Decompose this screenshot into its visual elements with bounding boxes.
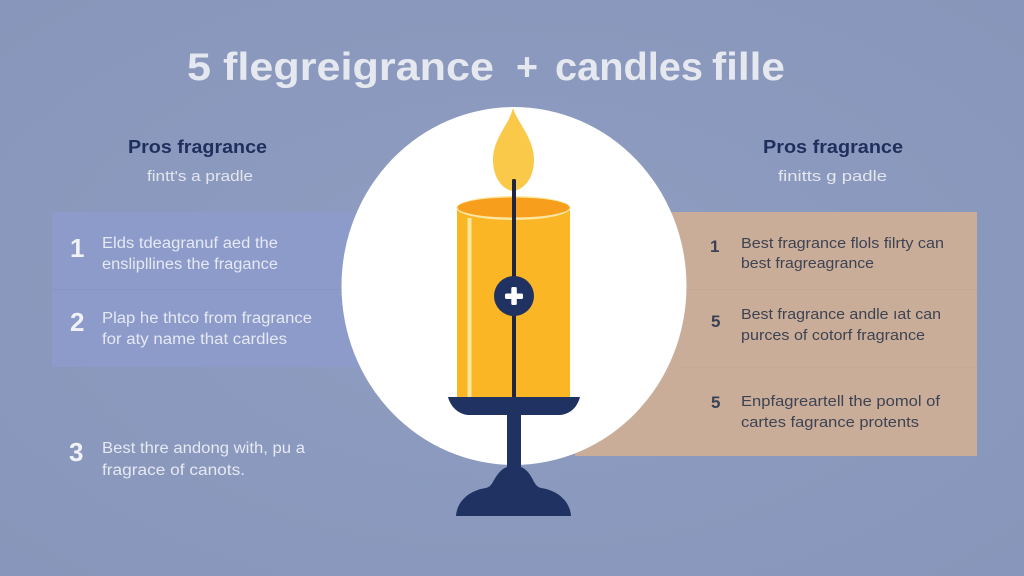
left item 2: Plap he thtco from fragrance <box>102 310 312 327</box>
title <box>187 46 785 89</box>
right item 1: best fragreagrance <box>741 255 874 272</box>
right item 2: purces of cotorf fragrance <box>741 327 925 344</box>
title: 5 flegreigrance <box>187 46 494 89</box>
heading: right column <box>763 137 903 185</box>
left item 1: enslipllines the fragance <box>102 256 278 273</box>
panel: right pros list background <box>575 212 977 456</box>
heading: right column: Pros fragrance <box>763 137 903 157</box>
left item 3: 3 <box>69 437 83 467</box>
icon: candle <box>448 108 580 516</box>
right item 3: 5 <box>711 393 720 412</box>
right item 1: Best fragrance flols filrty can <box>741 235 944 252</box>
left item 1: Elds tdeagranuf aed the <box>102 235 278 252</box>
left item 2: 2 <box>70 307 84 337</box>
candle holder <box>448 397 580 516</box>
left item 2: for aty name that cardles <box>102 331 287 348</box>
plus badge <box>494 276 534 316</box>
panel: left pros list background <box>52 212 362 367</box>
title: + <box>516 46 538 89</box>
heading: left column: Pros fragrance <box>128 137 267 157</box>
right column subheading: finitts g padle <box>778 169 887 185</box>
candle flame <box>493 108 534 191</box>
right item 3: cartes fagrance protents <box>741 414 919 431</box>
left item 3 <box>69 437 305 479</box>
right item 1: 1 <box>710 237 719 256</box>
left column subheading: fintt's a pradle <box>147 169 253 185</box>
right item 2 <box>711 306 941 344</box>
title: candles <box>555 46 703 89</box>
left item 1 <box>70 233 278 273</box>
candle body <box>456 196 570 398</box>
right item 3: Enpfagreartell the pomol of <box>741 393 941 410</box>
left item 2 <box>70 307 312 348</box>
left item 3: fragrace of canots. <box>102 462 245 479</box>
title: fille <box>712 46 785 89</box>
right item 2: Best fragrance andle ıat can <box>741 306 941 323</box>
white centre circle <box>342 107 686 465</box>
candle wick <box>512 179 516 398</box>
right item 3 <box>711 393 941 431</box>
right item 2: 5 <box>711 312 720 331</box>
left item 1: 1 <box>70 233 84 263</box>
right item 1 <box>710 235 944 272</box>
heading: left column <box>128 137 267 185</box>
left item 3: Best thre andong with, pu a <box>102 440 305 457</box>
